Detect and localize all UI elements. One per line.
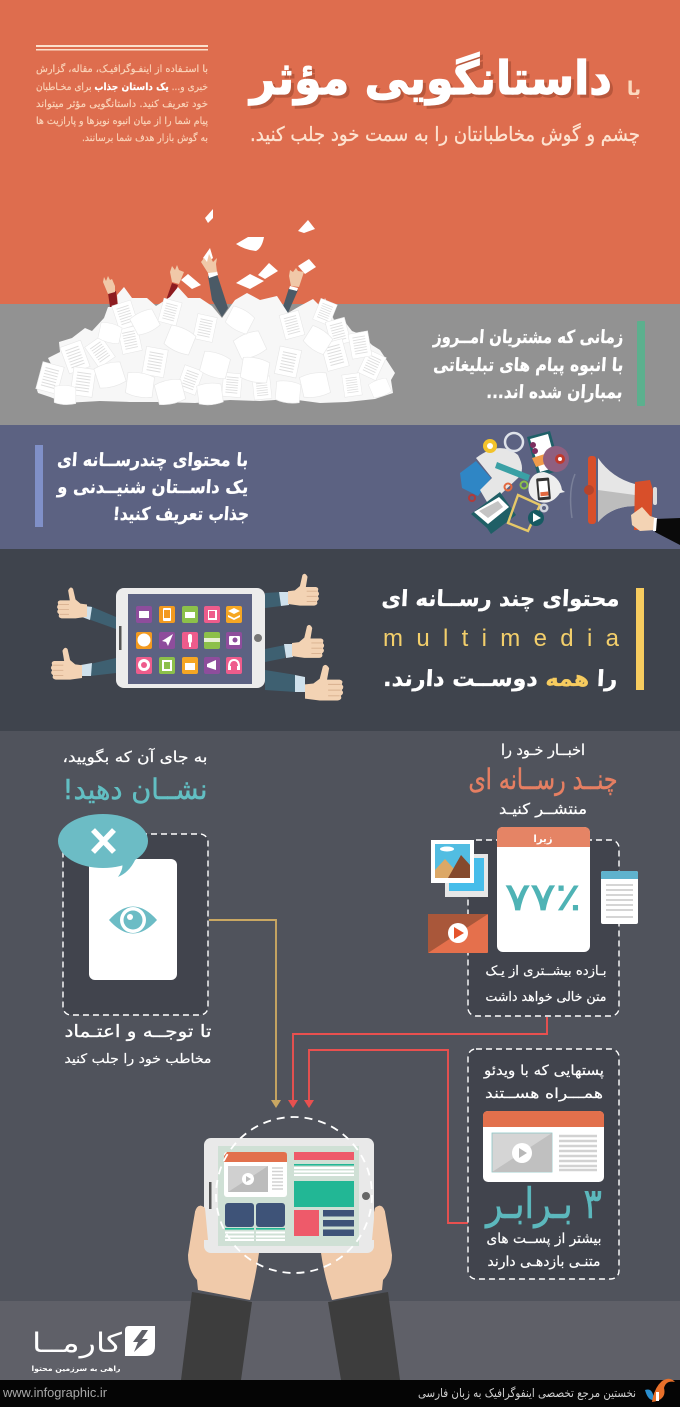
heading: publish your news multimedia: منتشــر کنیـد [499, 800, 587, 818]
left sleeve [181, 1292, 252, 1380]
heading: publish your news multimedia [468, 741, 618, 818]
tablet [204, 1138, 374, 1253]
panel: 3 times: متنـی بازدهـی دارند [488, 1254, 600, 1270]
footer: نخستین مرجع تخصصی اینفوگرافیک به زبان فارسی [418, 1386, 636, 1401]
individual papers [36, 298, 392, 407]
accent bar green [637, 321, 645, 406]
panel: customers bombarded: بمباران شده اند... [486, 382, 623, 403]
panel: tell a story: جذاب تعریف کنید! [112, 504, 250, 525]
panel: 3 times: ۳ بـرابـر [484, 1179, 602, 1228]
footer: www.infographic.ir [2, 1385, 108, 1400]
title main line: داستانگویی مؤثر [248, 51, 612, 105]
connector lines [209, 920, 547, 1223]
icon: media cluster [460, 431, 569, 534]
icon: megaphone [571, 456, 680, 545]
panel: 77 percent: بـازده بیشــتری از یـک [486, 964, 606, 979]
subtitle: چشم و گوش مخاطبانتان را به سمت خود جلب کنید. [250, 122, 640, 146]
illustration: hands holding tablet [181, 1117, 400, 1380]
flying papers [181, 209, 316, 289]
thumbs over tablet [195, 1206, 208, 1240]
panel: multimedia: محتوای چند رســانه ای [381, 587, 620, 612]
illustration: paper pile with arms [36, 209, 395, 407]
intro paragraph: خبری و... یک داستان جذاب برای مخـاطبان [36, 82, 208, 93]
icon: photos [431, 840, 488, 897]
icon: infographic.ir logo [645, 1379, 675, 1402]
panel: customers bombarded: با انبوه پیام های تبلیغاتی [433, 355, 624, 376]
accent bar blue [35, 445, 43, 527]
left hand [188, 1206, 259, 1300]
card 77% [497, 827, 590, 952]
heading: publish your news multimedia: چنــد رســانه ای [468, 763, 618, 796]
panel: show don't tell: به جای آن که بگویید، [62, 748, 208, 766]
panel: multimedia: را همه دوســت دارند. [383, 667, 618, 692]
intro paragraph: به گوش بازار هدف شما برسانند. [82, 132, 208, 144]
panel: tell a story: با محتوای چندرســانه ای [57, 450, 249, 471]
footer [2, 1379, 675, 1402]
illustration: tablet with thumbs up [51, 574, 343, 701]
dashed box [468, 840, 619, 1016]
panel: show don't tell: تا توجــه و اعتـماد [64, 1022, 212, 1042]
intro paragraph: با استـفاده از اینفـوگرافیـک، مقاله، گزارش [36, 63, 208, 75]
arm: centre dark [201, 254, 228, 317]
panel: 3 times [468, 1049, 619, 1279]
logo: Karma: راهی به سرزمین محتوا [32, 1365, 120, 1373]
panel: 3 times: پستهایی که با ویدئو [483, 1063, 604, 1079]
panel: customers bombarded [432, 321, 645, 406]
panel: customers bombarded: زمانی که مشتریان امــروز [432, 327, 624, 348]
dashed box [468, 1049, 619, 1279]
title word: with: با [627, 78, 641, 100]
right sleeve [328, 1292, 400, 1380]
logo: Karma [32, 1326, 155, 1373]
card with eye [89, 859, 177, 980]
panel: tell a story: یک داســتان شنیــدنی و [56, 477, 249, 498]
arms and thumbs [265, 592, 281, 608]
arm: left red [103, 276, 118, 307]
panel: multimedia: multimedia [383, 625, 620, 652]
tablet body [116, 588, 265, 688]
intro paragraph: پیام شما را از میان انبوه نویزها و پارازیت ها [36, 116, 208, 127]
app icons [136, 606, 242, 674]
heading: publish your news multimedia: اخبــار خـود را [501, 741, 585, 759]
paper mound [37, 287, 395, 403]
arm: second red [164, 265, 184, 306]
card 77%: زیرا [533, 834, 553, 845]
panel: 3 times: همـــراه هســتند [485, 1086, 603, 1102]
logo: Karma: کارمــا [32, 1328, 122, 1359]
panel: multimedia [381, 587, 644, 692]
arm: right dark [281, 268, 304, 313]
panel: tell a story [35, 445, 250, 527]
panel: show don't tell: نشــان دهید! [62, 773, 208, 806]
icon: video [428, 914, 488, 953]
panel: show don't tell [58, 748, 212, 1067]
speech bubble with X [58, 814, 148, 877]
intro paragraph [36, 45, 208, 144]
dashed circle [216, 1117, 372, 1273]
panel: 77 percent: متن خالی خواهد داشت [486, 990, 606, 1005]
card 77%: ۷۷٪ [505, 875, 581, 919]
panel: 3 times: بیشتر از پســت های [486, 1231, 602, 1247]
intro paragraph: خود تعریف کنید. داستانگویی مؤثر میتواند [36, 98, 208, 110]
icon: document [601, 871, 638, 924]
accent bar yellow [636, 588, 644, 690]
dashed box [63, 834, 208, 1015]
title [248, 51, 641, 146]
video post card [483, 1111, 604, 1182]
panel: show don't tell: مخاطب خود را جلب کنید [64, 1052, 212, 1067]
logo icon [125, 1326, 155, 1356]
right hand [321, 1206, 392, 1300]
panel: 77 percent [428, 827, 638, 1016]
